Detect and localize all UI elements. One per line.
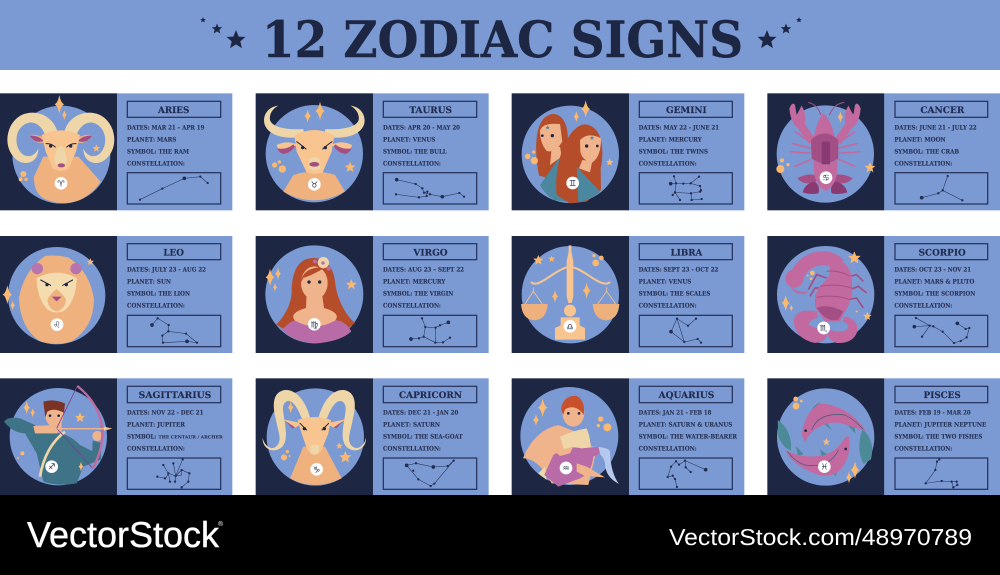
name box [639, 386, 732, 403]
illustration: two fishes: ♓︎ [821, 462, 828, 472]
details [383, 124, 460, 167]
illustration: scales [521, 245, 619, 343]
details: CONSTELLATION: [894, 445, 952, 452]
details: THE CENTAUR / ARCHER [158, 435, 223, 440]
panel: gemini [512, 93, 744, 210]
details: SYMBOL: THE TWO FISHES [894, 433, 982, 440]
name box: PISCES [924, 390, 961, 400]
details: DATES: APR 20 - MAY 20 [383, 124, 460, 131]
constellation chart [127, 173, 221, 204]
details: CONSTELLATION: [383, 160, 441, 167]
illustration: lion [3, 247, 105, 344]
illustration: sea-goat: ♑︎ [313, 465, 320, 474]
constellation chart [895, 173, 988, 204]
panel: libra [512, 236, 744, 353]
constellation chart [127, 315, 221, 347]
constellation chart [383, 315, 477, 347]
illustration: two fishes [777, 388, 874, 486]
constellation chart [383, 458, 477, 489]
panel: taurus [256, 93, 489, 210]
details: PLANET: JUPITER [127, 421, 185, 428]
details: CONSTELLATION: [383, 445, 441, 452]
name box: CANCER [920, 105, 965, 115]
details: CONSTELLATION: [127, 302, 185, 309]
details: DATES: AUG 23 – SEPT 22 [383, 266, 464, 273]
details: DATES: JULY 23 - AUG 22 [127, 266, 206, 273]
details: PLANET: MERCURY [383, 278, 446, 285]
name box [383, 386, 477, 403]
illustration: bull [264, 102, 365, 202]
panel: capricorn [256, 378, 489, 495]
details: PLANET: SUN [127, 278, 171, 285]
details [894, 266, 975, 309]
name box [383, 244, 477, 260]
panel: leo [0, 236, 232, 353]
details: DATES: JAN 21 - FEB 18 [639, 409, 711, 416]
illustration: ram: ♈︎ [57, 179, 65, 188]
details [127, 124, 204, 167]
panel: scorpio [767, 236, 1000, 353]
constellation chart [639, 458, 732, 489]
name box: LIBRA [671, 247, 703, 258]
name box [383, 101, 477, 117]
panel: aries [0, 93, 232, 210]
icon: stars left [200, 17, 246, 48]
details: CONSTELLATION: [639, 302, 697, 309]
constellation chart [895, 458, 988, 489]
name box [127, 244, 221, 260]
illustration: scorpion: ♏︎ [820, 323, 827, 333]
details [127, 409, 223, 452]
name box: SCORPIO [919, 247, 966, 258]
name box: CAPRICORN [399, 390, 462, 400]
illustration: water-bearer: ♒︎ [562, 463, 570, 473]
panel: sagittarius [0, 378, 232, 495]
illustration: virgin: ♍︎ [311, 320, 318, 329]
footer bar [0, 495, 1000, 575]
details: SYMBOL: THE SEA-GOAT [383, 433, 463, 440]
watermark logo text: VectorStock [27, 514, 220, 555]
illustration: water-bearer [520, 387, 619, 487]
details: CONSTELLATION: [127, 160, 185, 167]
details: CONSTELLATION: [127, 445, 185, 452]
illustration: scales: ♎︎ [566, 322, 574, 331]
illustration: crab [776, 102, 875, 203]
illustration: scorpion [777, 246, 874, 343]
details: DATES: MAR 21 – APR 19 [127, 124, 204, 131]
name box: GEMINI [666, 105, 707, 115]
illustration: twins: ♊︎ [569, 178, 576, 188]
constellation chart [383, 173, 477, 204]
name box [895, 244, 988, 260]
illustration: archer [4, 386, 112, 485]
details [894, 409, 986, 452]
illustration: lion: ♌︎ [53, 320, 61, 330]
details: PLANET: MARS [127, 136, 176, 143]
name box [895, 386, 988, 403]
details: SYMBOL: THE SCORPION [894, 290, 975, 297]
details: PLANET: SATURN & URANUS [639, 421, 732, 428]
panel: virgo [256, 236, 489, 353]
details: CONSTELLATION: [383, 302, 441, 309]
illustration: archer: ♐︎ [48, 462, 55, 472]
details: DATES: FEB 19 - MAR 20 [894, 409, 971, 416]
name box: TAURUS [409, 105, 452, 115]
details: SYMBOL: THE VIRGIN [383, 290, 453, 297]
constellation chart [639, 315, 732, 347]
details: SYMBOL: THE LION [127, 290, 190, 297]
name box [127, 101, 221, 117]
details: DATES: DEC 21 - JAN 20 [383, 409, 458, 416]
details [894, 124, 977, 167]
name box: SAGITTARIUS [139, 390, 211, 400]
panel: aquarius [512, 378, 744, 495]
illustration: bull: ♉︎ [311, 180, 318, 189]
constellation chart [895, 315, 988, 347]
header banner [0, 0, 1000, 70]
name box [127, 386, 221, 403]
illustration: twins [522, 100, 619, 203]
name box: ARIES [158, 105, 189, 115]
details: SYMBOL: [127, 433, 156, 440]
name box: LEO [163, 247, 184, 258]
panel: pisces [767, 378, 1000, 495]
name box: VIRGO [413, 247, 448, 258]
details: CONSTELLATION: [894, 302, 952, 309]
constellation chart [639, 173, 732, 204]
details: PLANET: JUPITER NEPTUNE [894, 421, 986, 428]
watermark url: VectorStock.com/48970789 [669, 524, 972, 550]
details: SYMBOL: THE RAM [127, 148, 189, 155]
details: SYMBOL: THE CRAB [894, 148, 959, 155]
name box [639, 101, 732, 117]
details: SYMBOL: THE SCALES [639, 290, 710, 297]
name box: AQUARIUS [658, 390, 714, 400]
details [639, 124, 719, 167]
illustration: ram [7, 95, 114, 204]
details: PLANET: SATURN [383, 421, 440, 428]
details: PLANET: VENUS [383, 136, 435, 143]
details: SYMBOL: THE TWINS [639, 148, 708, 155]
illustration: sea-goat [263, 388, 366, 486]
details: PLANET: MERCURY [639, 136, 702, 143]
details: SYMBOL: THE WATER-BEARER [639, 433, 737, 440]
illustration: virgin [265, 245, 363, 343]
details [383, 409, 463, 452]
details: CONSTELLATION: [894, 160, 952, 167]
panel: cancer [767, 93, 1000, 210]
details: DATES: SEPT 23 - OCT 22 [639, 266, 718, 273]
details [639, 266, 718, 309]
details: PLANET: VENUS [639, 278, 691, 285]
details: CONSTELLATION: [639, 160, 697, 167]
details: DATES: MAY 22 - JUNE 21 [639, 124, 719, 131]
details: DATES: NOV 22 - DEC 21 [127, 409, 203, 416]
details [127, 266, 206, 309]
details: SYMBOL: THE BULL [383, 148, 447, 155]
details: DATES: OCT 23 - NOV 21 [894, 266, 971, 273]
details: PLANET: MARS & PLUTO [894, 278, 974, 285]
illustration: crab: ♋︎ [822, 173, 830, 183]
details: PLANET: MOON [894, 136, 946, 143]
name box [639, 244, 732, 260]
name box [895, 101, 988, 117]
title: 12 ZODIAC SIGNS [262, 10, 743, 69]
details: DATES: JUNE 21 - JULY 22 [894, 124, 977, 131]
constellation chart [127, 458, 221, 489]
details [383, 266, 464, 309]
details [639, 409, 737, 452]
watermark registered mark: ® [218, 521, 224, 528]
details: CONSTELLATION: [639, 445, 697, 452]
icon: stars right [758, 17, 802, 48]
